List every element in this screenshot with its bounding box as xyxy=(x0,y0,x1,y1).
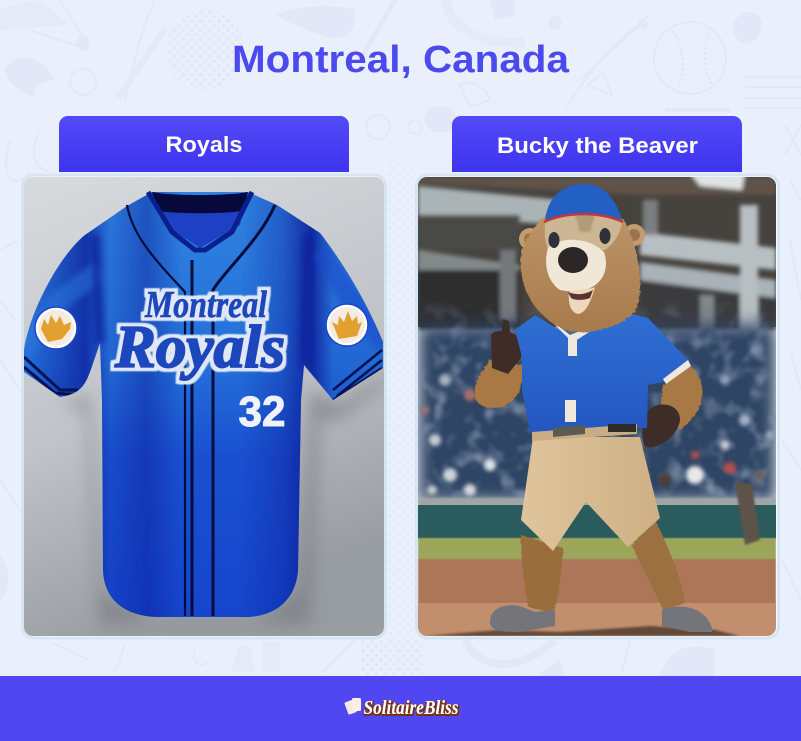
stadium background xyxy=(418,173,776,636)
footer bar xyxy=(0,676,801,741)
mascot belt xyxy=(532,424,637,441)
mascot legs xyxy=(521,520,685,613)
mascot jersey xyxy=(515,313,691,432)
mascot pants xyxy=(521,437,660,551)
tab: Royals xyxy=(59,116,349,172)
mascot head xyxy=(519,209,645,332)
mascot left arm and thumbs-up glove xyxy=(474,319,523,408)
wordmark: Montreal Royals: Montreal xyxy=(144,284,267,326)
logo: Solitaire Bliss: SolitaireBliss xyxy=(364,697,459,719)
logo icon: cards xyxy=(344,698,361,715)
collar and inner neck xyxy=(148,192,252,250)
piping xyxy=(127,205,275,616)
mascot right arm and glove xyxy=(642,366,702,447)
wordmark: Montreal Royals: Royals xyxy=(114,314,285,380)
panel: Bucky the Beaver mascot xyxy=(416,173,778,638)
mascot shoes xyxy=(490,605,712,632)
panel: Royals jersey xyxy=(22,175,386,638)
title: Montreal, Canada xyxy=(232,39,570,81)
tab: Royals: Royals xyxy=(166,132,242,157)
jersey xyxy=(24,190,385,620)
tab: Bucky the Beaver xyxy=(452,116,742,172)
sleeve patch: crown right xyxy=(326,304,368,346)
sleeve patch: crown left xyxy=(35,307,77,349)
tab: Bucky the Beaver: Bucky the Beaver xyxy=(497,133,698,158)
wordmark: Montreal Royals xyxy=(114,284,285,380)
jersey number 32: 32 xyxy=(238,388,286,436)
mascot cap xyxy=(544,184,623,222)
